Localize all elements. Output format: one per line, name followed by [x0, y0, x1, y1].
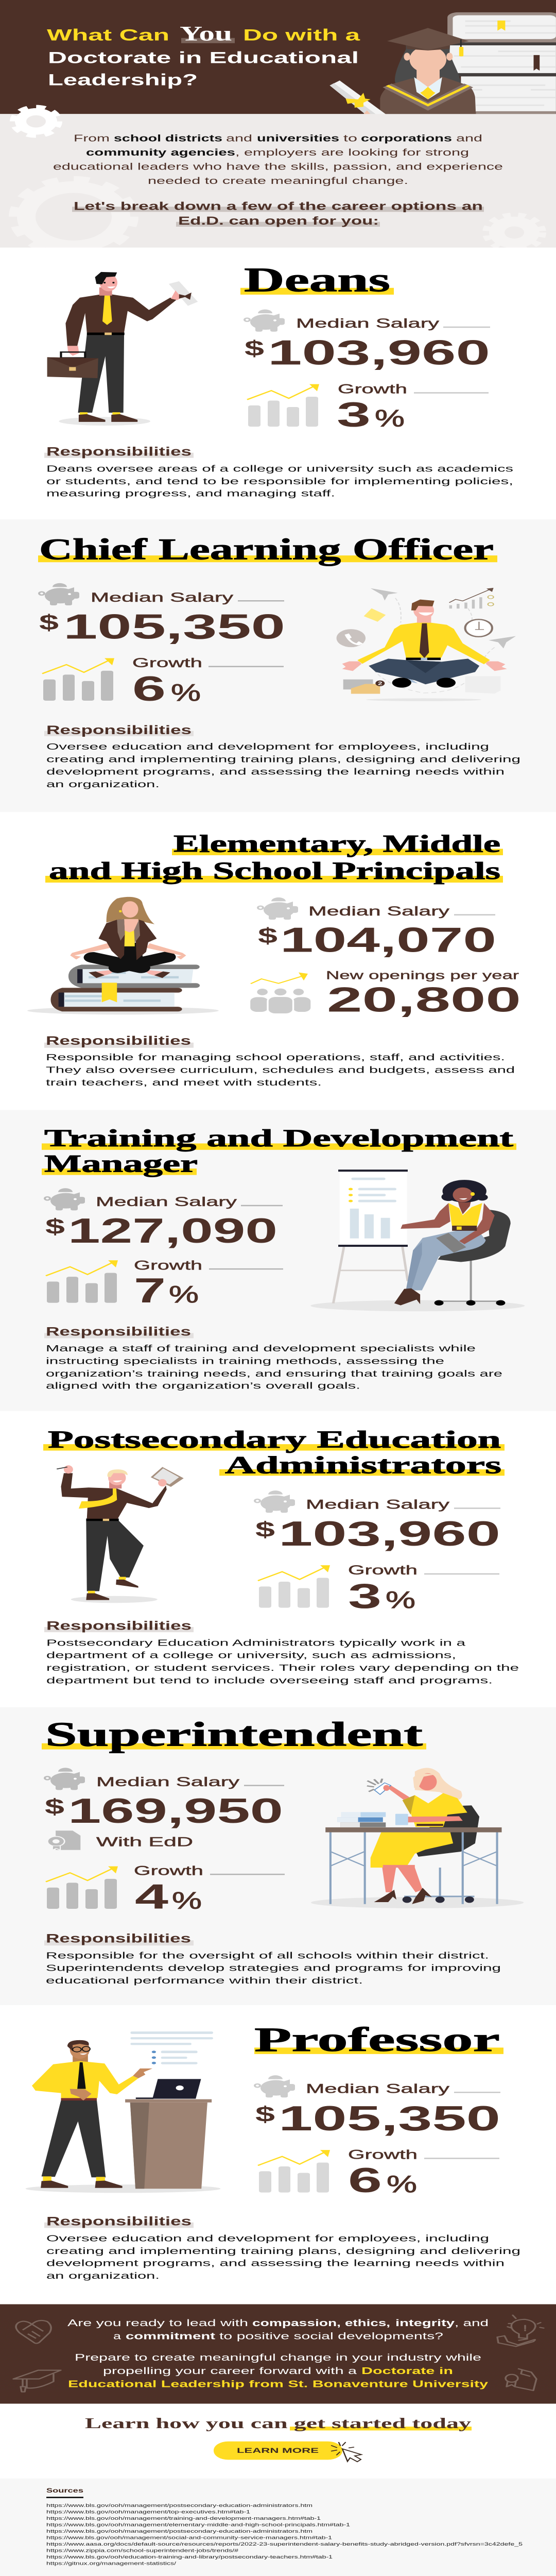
- median salary label: Median Salary: [308, 904, 449, 919]
- icon: light bulb in hand: [497, 2315, 544, 2346]
- responsibilities text: Manage a staff of training and development specialists while: [46, 1343, 476, 1353]
- panel: Chief Learning Officer: [0, 519, 556, 812]
- growth label: Growth: [348, 1564, 418, 1578]
- illustration: meditating officer with floating icons: 2: [378, 681, 383, 686]
- salary figure: 105,350: [279, 2099, 500, 2138]
- responsibilities text: [46, 464, 513, 498]
- sources heading: Sources: [46, 2487, 83, 2494]
- salary figure: $: [255, 2103, 275, 2126]
- sources list: https://gitnux.org/management-statistics/: [46, 2561, 177, 2566]
- button: learn more: LEARN MORE: [237, 2447, 319, 2454]
- icon: group of people: [250, 989, 310, 1014]
- chart: growth icon: [42, 658, 114, 701]
- responsibilities text: Oversee education and development for employees, including: [46, 741, 489, 752]
- responsibilities text: department but tend to include overseeing staff and programs.: [46, 1675, 493, 1685]
- intro paragraph: to: [343, 133, 357, 144]
- panel: learn more: [0, 2404, 556, 2479]
- panel: Professor: [0, 2005, 556, 2304]
- growth figure: %: [172, 1887, 202, 1914]
- illustration: professor at podium with laptop: [26, 2031, 220, 2193]
- growth figure: %: [169, 1281, 199, 1308]
- intro paragraph: school districts: [114, 133, 222, 144]
- responsibilities text: Responsible for managing school operations, staff, and activities.: [46, 1052, 505, 1062]
- growth label: Growth: [348, 2148, 418, 2162]
- sources list: https://www.bls.gov/ooh/management/social-and-community-service-managers.htm#tab-1: [46, 2535, 332, 2540]
- growth label: Growth: [132, 656, 202, 670]
- intro paragraph: , employers are looking for strong: [235, 147, 469, 158]
- growth figure: [132, 669, 201, 708]
- median salary label: Median Salary: [91, 590, 233, 605]
- responsibilities heading: Responsibilities: [46, 1325, 191, 1338]
- median salary label: Median Salary: [306, 2082, 449, 2096]
- panel: hero header: [0, 0, 556, 135]
- sources list: https://www.zippia.com/school-superintendent-jobs/trends/#: [46, 2548, 239, 2553]
- chart: growth icon: [46, 1866, 118, 1909]
- responsibilities text: development programs, and assessing the learning needs within: [46, 767, 505, 776]
- median salary label: Median Salary: [96, 1195, 237, 1209]
- salary figure: $: [255, 1518, 275, 1541]
- section background: [0, 2005, 556, 2304]
- responsibilities text: Postsecondary Education Administrators typically work in a: [46, 1638, 465, 1648]
- illustration: superintendent at desk: [311, 1768, 524, 1908]
- heading: Postsecondary Education Administrators: [43, 1426, 505, 1479]
- icon: piggy bank: [45, 1188, 85, 1210]
- salary figure: 104,070: [280, 921, 496, 959]
- responsibilities heading: Responsibilities: [46, 723, 192, 737]
- growth figure: 6: [348, 2161, 382, 2200]
- growth figure: [337, 395, 405, 434]
- intro paragraph: corporations: [361, 133, 452, 144]
- intro paragraph: [53, 133, 503, 186]
- openings figure: 20,800: [327, 980, 521, 1020]
- growth figure: 3: [348, 1577, 381, 1616]
- title: Doctorate in Educational: [48, 48, 359, 66]
- salary figure: 127,090: [68, 1211, 277, 1250]
- banner background: [0, 2304, 556, 2404]
- heading: Professor: Professor: [254, 2021, 500, 2059]
- panel: sources: [0, 2479, 556, 2576]
- salary figure: $: [245, 336, 264, 361]
- subheading: career options: Ed.D. can open for you:: [178, 215, 379, 227]
- growth figure: %: [171, 680, 201, 706]
- sources list: https://www.aasa.org/docs/default-source/resources/reports/2022-23-superintendent-salary-benefits-study-abridged-version.pdf?sfvrsn=3c42defe_5: [46, 2542, 523, 2547]
- growth figure: 6: [132, 669, 166, 708]
- median salary label: Median Salary: [96, 1775, 239, 1789]
- salary figure: 103,960: [268, 333, 490, 372]
- icon: certificate outline: [506, 2369, 536, 2391]
- banner copy: propelling your career forward with a: [103, 2366, 357, 2377]
- panel: Principals: [0, 812, 556, 1110]
- responsibilities heading: Responsibilities: [46, 2214, 192, 2228]
- growth figure: 4: [135, 1877, 169, 1916]
- banner copy: integrity: [395, 2318, 455, 2328]
- responsibilities text: educational performance within their district.: [46, 1975, 363, 1986]
- banner copy: Doctorate in: [361, 2366, 453, 2377]
- banner copy: to positive social developments?: [219, 2331, 443, 2342]
- responsibilities text: organization’s training needs, and ensuring that training goals are: [46, 1368, 502, 1379]
- responsibilities heading: Responsibilities: [46, 445, 192, 459]
- intro paragraph: and: [226, 133, 252, 144]
- sources list: https://www.bls.gov/ooh/management/training-and-development-managers.htm#tab-1: [46, 2516, 321, 2521]
- growth figure: %: [387, 2171, 417, 2197]
- title: What Can: [47, 26, 169, 44]
- responsibilities text: creating and implementing training plans, designing and delivering: [46, 2246, 520, 2256]
- responsibilities text: [46, 1638, 519, 1685]
- intro paragraph: educational leaders who have the skills, passion, and experience: [53, 162, 503, 172]
- banner copy: compassion,: [252, 2318, 341, 2328]
- responsibilities text: [46, 1951, 501, 1986]
- illustration: woman meditating on books: [27, 897, 219, 1014]
- growth figure: [348, 1577, 415, 1616]
- icon: piggy bank: [45, 1768, 85, 1790]
- responsibilities text: Responsible for the oversight of all schools within their district.: [46, 1951, 489, 1960]
- illustration: dean with briefcase and diploma: [47, 272, 198, 426]
- growth label: Growth: [134, 1864, 203, 1878]
- intro paragraph: From: [74, 133, 110, 144]
- responsibilities text: development programs, and assessing the learning needs within: [46, 2258, 505, 2268]
- salary figure: 169,950: [68, 1791, 283, 1831]
- salary figure: $: [258, 924, 277, 948]
- sources list: https://www.bls.gov/ooh/management/postsecondary-education-administrators.htm: [46, 2503, 312, 2508]
- responsibilities text: aligned with the organization’s overall goals.: [46, 1381, 360, 1391]
- responsibilities text: creating and implementing training plans, designing and delivering: [46, 754, 520, 764]
- banner copy: Prepare to create meaningful change in your industry while: [75, 2352, 481, 2363]
- heading: Elementary, Middle and High School Principals: Elementary, Middle: [173, 830, 500, 857]
- icon: right faint gear: [486, 215, 543, 250]
- responsibilities text: an organization.: [46, 779, 160, 789]
- sources list: https://www.bls.gov/ooh/management/top-executives.htm#tab-1: [46, 2510, 250, 2515]
- responsibilities text: Oversee education and development for employees, including: [46, 2233, 489, 2243]
- intro background: [0, 114, 556, 248]
- icon: cursor: [332, 2443, 361, 2462]
- responsibilities text: [46, 741, 520, 789]
- chart: growth icon: [46, 1260, 118, 1303]
- banner copy: [67, 2318, 489, 2389]
- growth label: Growth: [134, 1259, 202, 1273]
- new openings label: New openings per year: [326, 969, 519, 982]
- heading: Elementary, Middle and High School Principals: [45, 830, 503, 885]
- salary figure: 103,960: [279, 1514, 500, 1553]
- responsibilities text: Deans oversee areas of a college or university such as academics: [46, 464, 513, 473]
- responsibilities text: [46, 2233, 520, 2281]
- chart: growth icon: [247, 384, 319, 427]
- illustration: meditating officer with floating icons: [337, 588, 516, 701]
- hero background: [0, 0, 556, 114]
- section background: [0, 1707, 556, 2005]
- section background: [0, 1411, 556, 1707]
- chart: growth icon: [258, 1565, 330, 1608]
- title: [47, 22, 360, 89]
- title: Leadership?: [48, 71, 198, 89]
- illustration: woman presenting at chart board: [310, 1170, 525, 1311]
- with EdD label: With EdD: [96, 1835, 193, 1850]
- salary figure: $: [39, 611, 59, 634]
- panel: introduction: [0, 107, 556, 253]
- heading: Training and Development Manager: Manager: [44, 1150, 198, 1177]
- icon: small gear top left (over panel): [13, 107, 59, 135]
- illustration: stacked books: [447, 12, 556, 114]
- illustration: woman, desk and binders: [325, 1768, 502, 1868]
- panel: Training and Development Manager: [0, 1110, 556, 1411]
- chart: growth icon: [258, 2150, 330, 2193]
- icon: piggy bank: [258, 897, 298, 920]
- sources list: https://www.bls.gov/ooh/management/elementary-middle-and-high-school-principals.htm#tab-1: [46, 2522, 350, 2528]
- icon: piggy bank: [245, 310, 285, 332]
- banner copy: Are you ready to lead with: [67, 2318, 248, 2328]
- sources list: [46, 2503, 523, 2566]
- banner copy: , and: [455, 2318, 489, 2328]
- heading: Training and Development Manager: Training and Development: [44, 1124, 514, 1151]
- heading: Postsecondary Education Administrators: Administrators: [225, 1451, 501, 1479]
- icon: piggy bank: [39, 583, 79, 605]
- panel: Deans: [0, 248, 556, 519]
- banner copy: commitment: [126, 2331, 215, 2342]
- sources heading: [46, 2487, 83, 2498]
- subheading: career options: Let's break down a few of the career options an: [74, 200, 483, 213]
- title: You: [180, 22, 232, 45]
- responsibilities text: an organization.: [46, 2270, 160, 2281]
- growth figure: [348, 2161, 417, 2200]
- responsibilities text: They also oversee curriculum, schedules and budgets, assess and: [46, 1065, 515, 1075]
- section background: [0, 519, 556, 812]
- responsibilities text: Superintendents develop strategies and programs for improving: [46, 1963, 501, 1973]
- responsibilities text: instructing specialists in training methods, assessing the: [46, 1356, 444, 1366]
- icon: piggy bank: [255, 1490, 295, 1513]
- heading: Superintendent: Superintendent: [45, 1716, 423, 1754]
- icon: heart handshake: [16, 2320, 51, 2343]
- heading: learn how: Learn how you can get started today: [85, 2415, 471, 2432]
- responsibilities text: registration, or student services. Their roles vary depending on the: [46, 1663, 519, 1673]
- heading: Deans: Deans: [244, 261, 390, 299]
- growth figure: 3: [337, 395, 371, 434]
- sources background: [0, 2479, 556, 2576]
- salary figure: $: [45, 1795, 64, 1819]
- icon: white gear, top left: [13, 107, 59, 135]
- sources list: https://www.bls.gov/ooh/management/postsecondary-education-administrators.htm: [46, 2529, 312, 2534]
- heading: Training and Development Manager: [42, 1124, 516, 1177]
- growth figure: [135, 1877, 202, 1916]
- responsibilities text: [46, 1052, 515, 1088]
- subheading: career options: [72, 200, 484, 227]
- section background: [0, 248, 556, 519]
- heading: Elementary, Middle and High School Principals: and High School Principals: [49, 857, 500, 885]
- responsibilities heading: Responsibilities: [46, 1619, 192, 1633]
- illustration: floor shadow, legs and chair base: [311, 1868, 524, 1908]
- intro paragraph: and: [456, 133, 482, 144]
- growth figure: [134, 1271, 199, 1310]
- title: Do with a: [243, 26, 360, 44]
- intro paragraph: community agencies: [86, 147, 235, 158]
- panel: call to action banner: [0, 2304, 556, 2404]
- sources list: https://www.bls.gov/ooh/education-training-and-library/postsecondary-teachers.htm#tab-1: [46, 2555, 333, 2560]
- banner copy: Educational Leadership from St. Bonaventure University: [68, 2379, 489, 2389]
- growth label: Growth: [338, 382, 407, 397]
- responsibilities text: [46, 1343, 502, 1391]
- icon: graduation cap: [13, 2370, 61, 2392]
- illustration: graduate with diploma: [329, 28, 476, 114]
- button: learn more: [214, 2442, 342, 2460]
- icon: piggy bank: [255, 2075, 295, 2097]
- median salary label: Median Salary: [306, 1498, 449, 1512]
- intro paragraph: universities: [257, 133, 339, 144]
- responsibilities text: department of a college or university, such as admissions,: [46, 1650, 456, 1660]
- section background: [0, 812, 556, 1110]
- responsibilities heading: Responsibilities: [46, 1033, 191, 1047]
- icon: arrow over people: [251, 973, 308, 984]
- salary figure: 105,350: [63, 607, 285, 646]
- intro paragraph: needed to create meaningful change.: [148, 176, 408, 186]
- growth figure: 7: [134, 1271, 166, 1310]
- icon: large faint gear: [14, 180, 133, 253]
- responsibilities text: train teachers, and meet with students.: [46, 1077, 322, 1088]
- heading: Postsecondary Education Administrators: Postsecondary Education: [48, 1426, 501, 1453]
- panel: Postsecondary Education Administrators: [0, 1411, 556, 1707]
- responsibilities heading: Responsibilities: [46, 1931, 191, 1945]
- banner copy: ethics,: [345, 2318, 390, 2328]
- median salary label: Median Salary: [296, 317, 439, 331]
- section background: [0, 1110, 556, 1411]
- illustration: administrator with pen and clipboard: [57, 1465, 184, 1603]
- growth figure: %: [386, 1587, 415, 1614]
- panel: Superintendent: [0, 1707, 556, 2005]
- responsibilities text: or students, and tend to be responsible for implementing policies,: [46, 476, 513, 486]
- growth figure: %: [375, 405, 405, 432]
- icon: certificate: [47, 1831, 80, 1850]
- banner copy: a: [113, 2331, 121, 2342]
- section background: [0, 2404, 556, 2479]
- salary figure: $: [45, 1215, 65, 1239]
- responsibilities text: measuring progress, and managing staff.: [46, 488, 335, 498]
- heading: Chief Learning Officer: Chief Learning Officer: [39, 532, 494, 566]
